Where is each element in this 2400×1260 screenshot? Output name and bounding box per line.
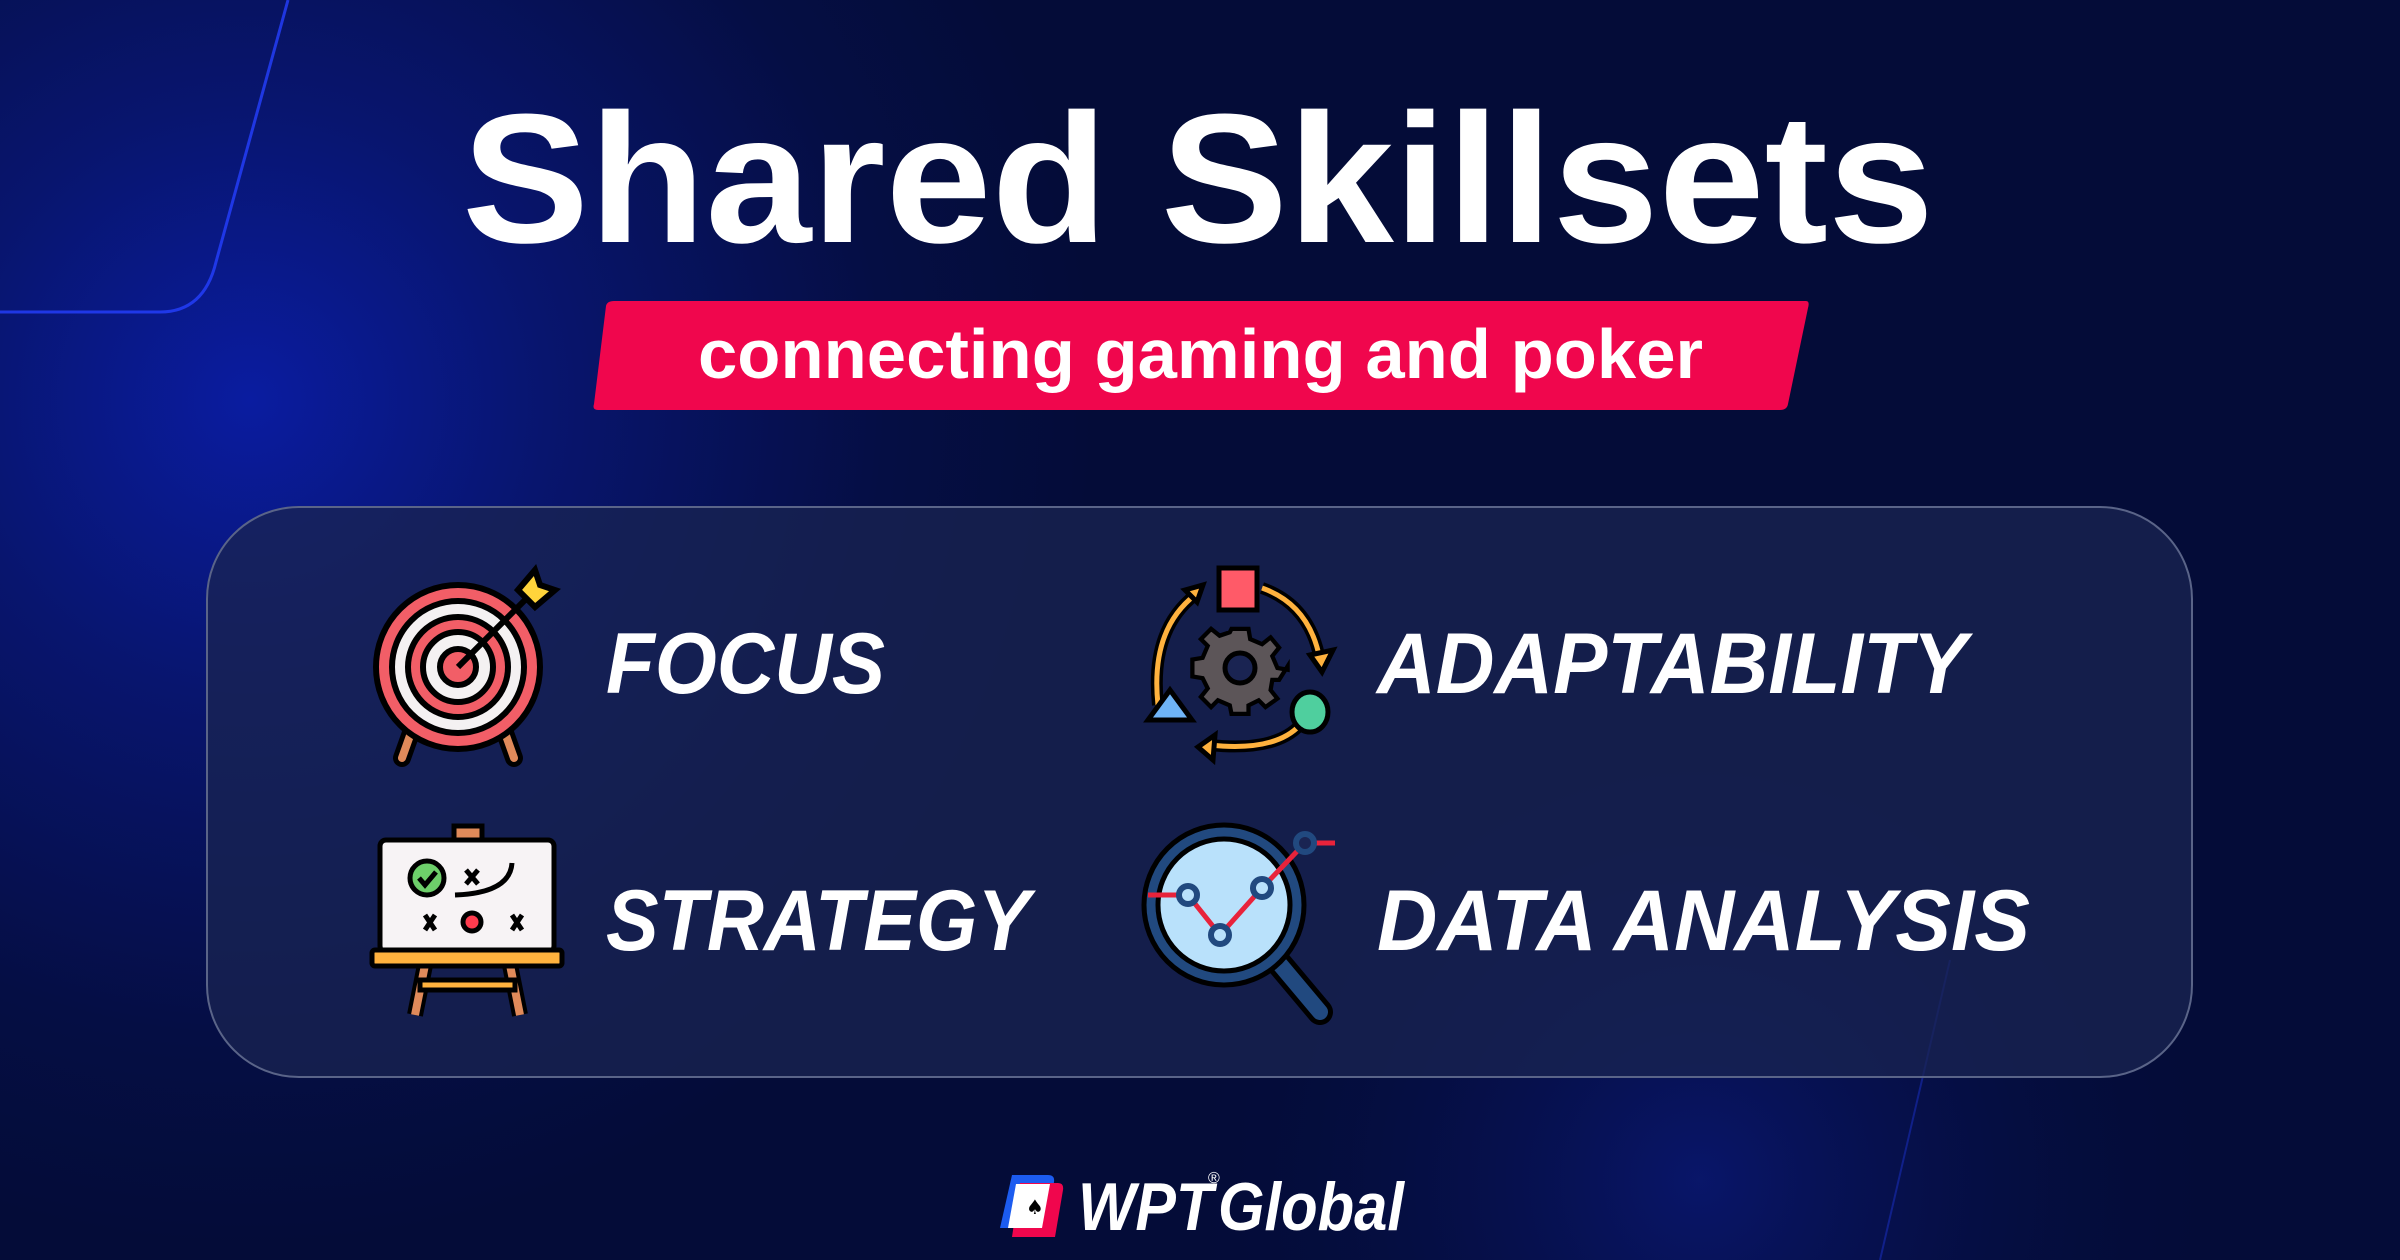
label: STRATEGY: STRATEGY [606,873,1036,969]
icon: adaptability [1148,568,1333,760]
logo: WPT Global: Global [1218,1169,1406,1245]
logo: WPT Global: WPT [1078,1169,1218,1245]
logo: WPT Global: ♠ [1026,1195,1044,1219]
icon: target [376,570,555,758]
logo: WPT Global [1000,1169,1406,1245]
icon: strategy easel [372,826,562,1015]
title: Shared Skillsets [462,75,1934,281]
logo: WPT Global: ® [1208,1170,1220,1187]
label: ADAPTABILITY: ADAPTABILITY [1375,616,1973,712]
banner: subtitle [594,301,1809,410]
label: DATA ANALYSIS: DATA ANALYSIS [1377,873,2030,969]
icon: data analysis magnifier [1144,825,1335,1012]
label: FOCUS: FOCUS [606,616,885,712]
panel: skills [207,507,2192,1077]
subtitle text: connecting gaming and poker [698,315,1703,393]
